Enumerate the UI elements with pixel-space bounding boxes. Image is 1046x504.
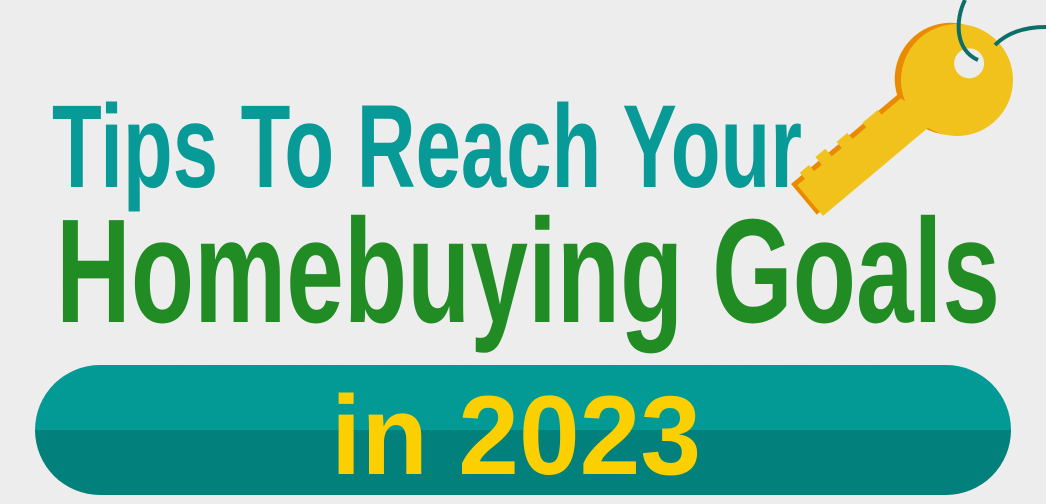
year text: in 2023 [331, 373, 701, 498]
year banner [35, 365, 1011, 498]
string [959, 0, 978, 60]
icon: key [769, 0, 1046, 248]
